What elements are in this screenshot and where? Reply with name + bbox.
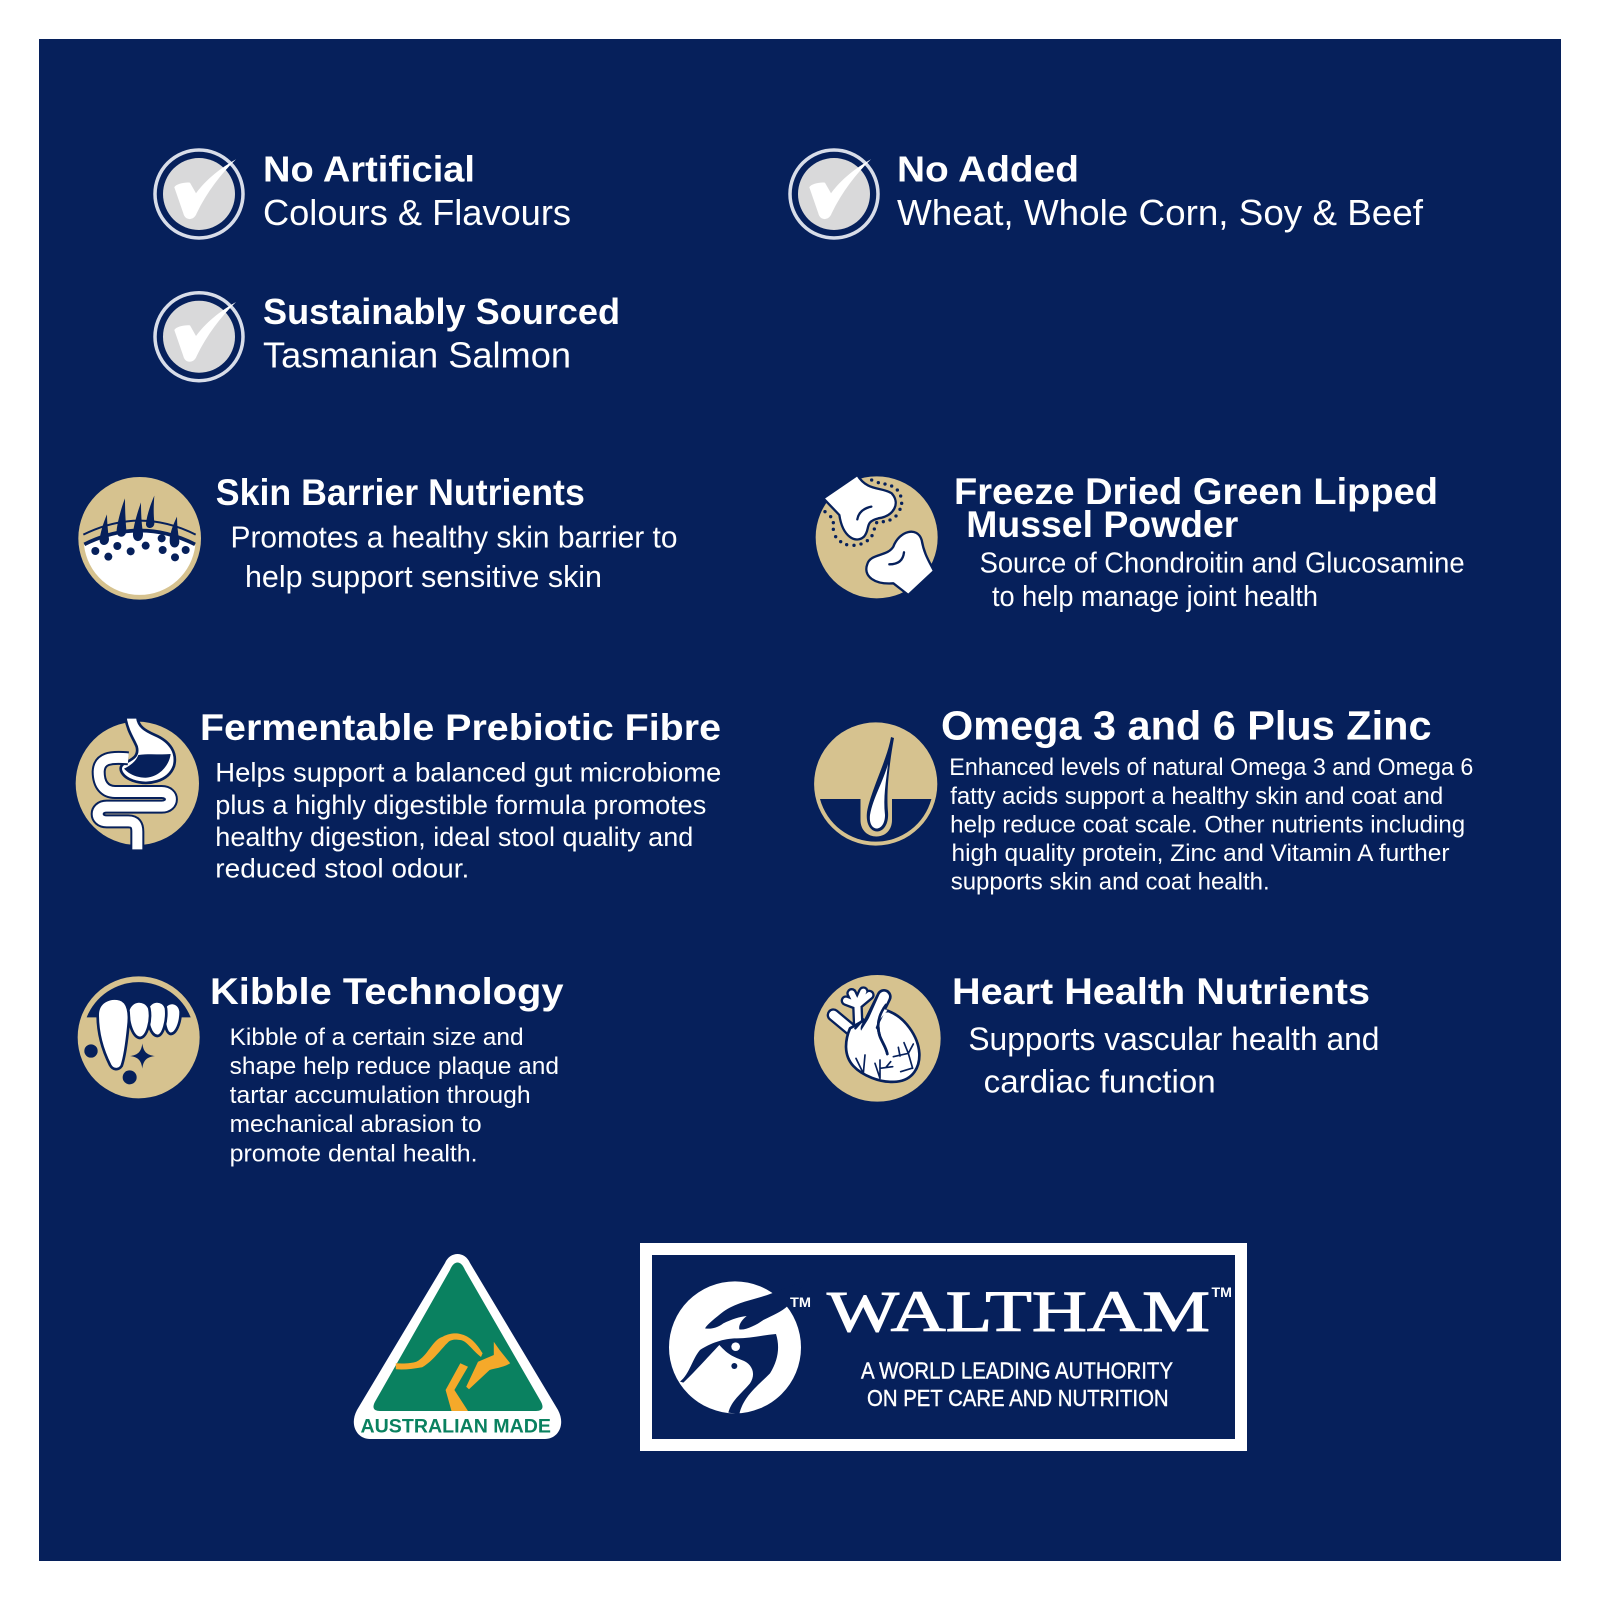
tagline: A WORLD LEADING AUTHORITY bbox=[861, 1357, 1173, 1383]
icon: check badge bbox=[155, 150, 243, 238]
benefit: omega 3 and 6 plus zinc bbox=[814, 702, 1473, 896]
heading: Kibble Technology bbox=[210, 971, 564, 1012]
benefit: heart health nutrients bbox=[814, 971, 1379, 1102]
heading: Skin Barrier Nutrients bbox=[216, 472, 585, 513]
heading: Omega 3 and 6 Plus Zinc bbox=[941, 702, 1432, 748]
icon: check badge bbox=[790, 150, 878, 238]
icon: skin follicles bbox=[78, 477, 201, 600]
icon: joints bbox=[816, 475, 938, 598]
logo: waltham bbox=[646, 1249, 1241, 1445]
icon: teeth bbox=[78, 976, 200, 1098]
trademark: TM bbox=[1212, 1284, 1232, 1300]
body text: Enhanced levels of natural Omega 3 and Omega 6 bbox=[949, 754, 1473, 781]
subtext: Colours & Flavours bbox=[263, 192, 571, 233]
text: AUSTRALIAN MADE bbox=[360, 1416, 551, 1437]
heading: Heart Health Nutrients bbox=[952, 971, 1370, 1012]
heading: Fermentable Prebiotic Fibre bbox=[200, 707, 721, 748]
logo: australian made bbox=[354, 1254, 561, 1439]
body text bbox=[230, 520, 678, 594]
wordmark: WALTHAM bbox=[827, 1279, 1210, 1344]
heading: Sustainably Sourced bbox=[263, 291, 620, 332]
heading: Freeze Dried Green Lipped bbox=[954, 471, 1438, 512]
body text: to help manage joint health bbox=[992, 581, 1318, 613]
heading bbox=[954, 471, 1438, 545]
benefit: skin barrier nutrients bbox=[78, 472, 678, 600]
heading: Mussel Powder bbox=[966, 504, 1238, 545]
body text: tartar accumulation through bbox=[230, 1082, 531, 1109]
body text: help reduce coat scale. Other nutrients including bbox=[950, 811, 1465, 838]
white triangle badge bbox=[354, 1254, 561, 1439]
benefit: kibble technology bbox=[78, 971, 564, 1168]
white frame bbox=[646, 1249, 1241, 1445]
left pipe: pulmonary vessel bbox=[833, 992, 869, 1032]
benefit: fermentable prebiotic fibre bbox=[76, 707, 721, 884]
body text: promote dental health. bbox=[230, 1140, 478, 1168]
body text: shape help reduce plaque and bbox=[230, 1053, 559, 1080]
heading: No Added bbox=[897, 149, 1079, 190]
icon: hair follicle bbox=[814, 722, 937, 846]
body text: reduced stool odour. bbox=[215, 854, 469, 884]
body text: help support sensitive skin bbox=[245, 559, 602, 594]
icon: check badge bbox=[155, 293, 243, 381]
kangaroo bbox=[396, 1333, 510, 1411]
trademark: TM bbox=[790, 1294, 811, 1310]
body text: mechanical abrasion to bbox=[230, 1111, 482, 1138]
body text bbox=[949, 754, 1473, 896]
body text: Source of Chondroitin and Glucosamine bbox=[980, 548, 1465, 580]
body text: cardiac function bbox=[984, 1064, 1216, 1100]
green triangle bbox=[373, 1262, 543, 1411]
body text: plus a highly digestible formula promotes bbox=[215, 790, 706, 820]
body text: high quality protein, Zinc and Vitamin A further bbox=[952, 840, 1450, 867]
body text: Promotes a healthy skin barrier to bbox=[230, 520, 678, 554]
claim: sustainably sourced tasmanian salmon bbox=[155, 291, 620, 381]
body text bbox=[980, 548, 1465, 613]
body text: Kibble of a certain size and bbox=[230, 1024, 524, 1051]
icon: heart bbox=[814, 975, 941, 1102]
icon: digestive tract bbox=[76, 717, 199, 849]
tagline bbox=[861, 1357, 1173, 1411]
claim: no added wheat, whole corn, soy and beef bbox=[790, 149, 1424, 238]
benefit: freeze dried green lipped mussel powder bbox=[816, 471, 1465, 613]
heading: No Artificial bbox=[263, 149, 475, 190]
body text: supports skin and coat health. bbox=[951, 868, 1270, 896]
body text: Supports vascular health and bbox=[968, 1021, 1379, 1057]
body text: Helps support a balanced gut microbiome bbox=[215, 758, 721, 788]
tagline: ON PET CARE AND NUTRITION bbox=[867, 1385, 1169, 1411]
body text bbox=[215, 758, 721, 884]
body text bbox=[230, 1024, 559, 1168]
subtext: Tasmanian Salmon bbox=[263, 335, 571, 376]
subtext: Wheat, Whole Corn, Soy & Beef bbox=[897, 192, 1424, 233]
body text: fatty acids support a healthy skin and coat and bbox=[950, 783, 1443, 810]
claim: no artificial colours and flavours bbox=[155, 149, 571, 238]
body text: healthy digestion, ideal stool quality and bbox=[215, 822, 693, 852]
emblem: hand and pets bbox=[669, 1280, 807, 1414]
body text bbox=[968, 1021, 1379, 1100]
